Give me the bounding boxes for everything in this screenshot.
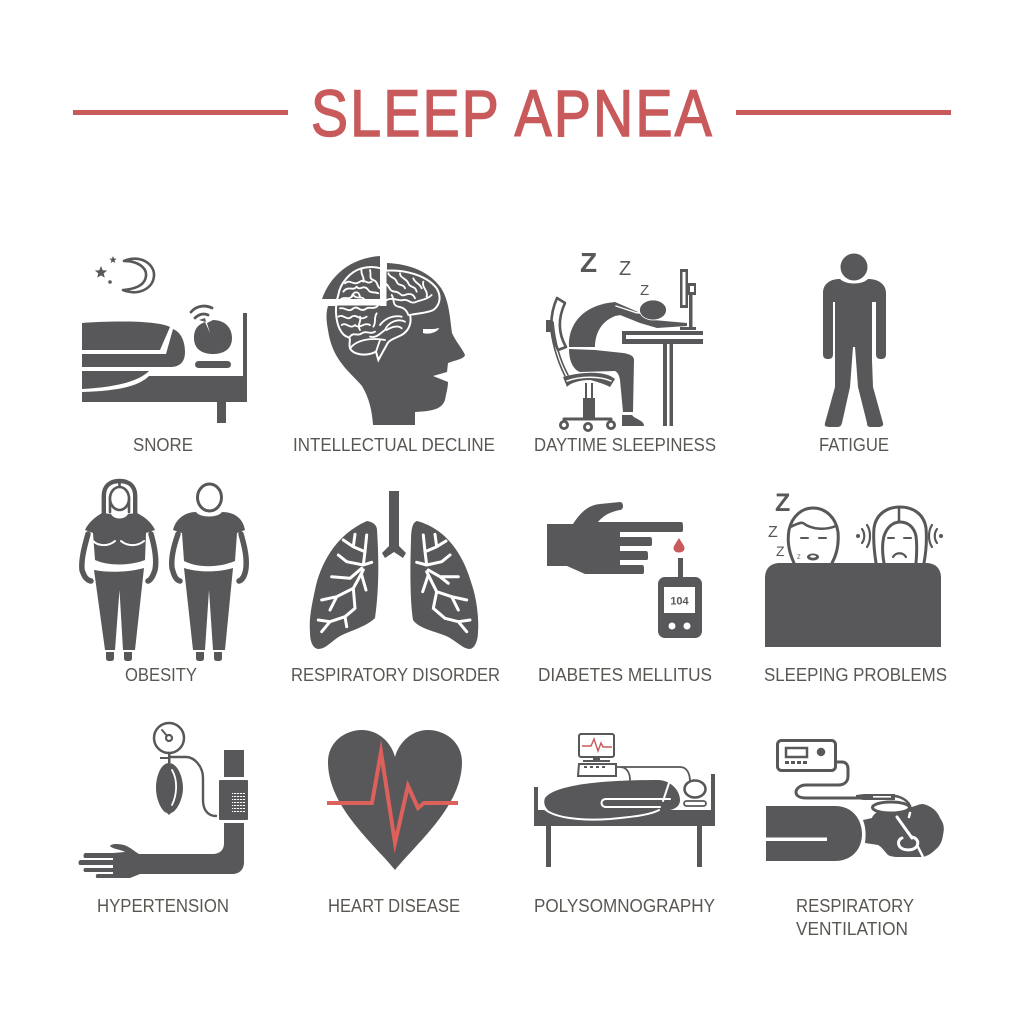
shoe [622,415,644,426]
label: respiratory ventilation: RESPIRATORY [796,896,914,916]
bulb [156,763,183,815]
mask strap [872,802,910,813]
snoring man [788,508,838,563]
wires [616,767,690,782]
sleep letters: Z [768,524,778,541]
glucose meter [658,558,702,638]
icon: heart with ecg [327,730,462,870]
trachea [382,491,406,558]
sleep letters: Z [776,543,785,559]
sleep letters: Z [640,282,649,299]
sleep letters: Z [619,258,631,280]
label: diabetes mellitus: DIABETES MELLITUS [538,665,712,685]
cut lines [380,254,386,306]
hand [547,502,683,574]
patient body [766,806,862,861]
blanket [765,563,941,647]
moon and stars [95,256,154,292]
bed [82,313,247,402]
label: daytime sleepiness: DAYTIME SLEEPINESS [534,435,716,455]
ecg line [327,752,458,843]
sleep letters [580,247,649,299]
icon: polysomnography [534,734,715,867]
sleeper [82,322,170,350]
icon: obesity couple [82,481,246,661]
cuff dial grid [232,792,245,813]
label: intellectual decline: INTELLECTUAL DECLINE [293,435,495,455]
label: respiratory ventilation [796,896,914,939]
icon: fatigue figure [823,254,886,427]
icon: brain head [320,254,465,425]
label: snore: SNORE [133,435,193,455]
legs [569,349,634,412]
title: SLEEP APNEA [311,76,712,150]
arm [615,306,687,328]
head and pillow [684,780,706,798]
monitor [680,269,688,308]
head silhouette [326,263,465,425]
brain [336,267,440,360]
label: heart disease: HEART DISEASE [328,896,460,916]
sleep letters [768,489,801,561]
bed [534,774,715,826]
patient head [863,804,944,857]
left branches [318,534,372,632]
icon: sleeping problems [765,489,943,647]
person torso [569,302,638,347]
head and sound [194,320,232,354]
label: respiratory ventilation: VENTILATION [796,919,908,939]
man [172,484,246,661]
label: fatigue: FATIGUE [819,435,889,455]
icon: respiratory ventilation [766,740,944,861]
desk [622,331,703,344]
icon: blood pressure cuff [78,723,248,878]
sleep letters: Z [775,489,790,517]
cuff [219,780,248,820]
label: hypertension: HYPERTENSION [97,896,229,916]
patient [544,780,680,818]
sleep letters: Z [580,247,597,278]
right lung [410,521,478,649]
eye [423,328,439,334]
right branches [417,534,470,632]
icon: lungs [310,491,478,649]
label: sleeping problems: SLEEPING PROBLEMS [764,665,947,685]
cpap machine [778,740,836,770]
label: polysomnography: POLYSOMNOGRAPHY [534,896,715,916]
hose [796,762,858,798]
head [640,300,666,320]
left lung [310,521,378,649]
office chair [546,298,615,431]
label: respiratory disorder: RESPIRATORY DISORDER [291,665,500,685]
mask tube [897,813,923,857]
label: obesity: OBESITY [125,665,197,685]
glucose meter: 104 [670,596,690,608]
sleep letters: Z [797,555,801,561]
upper arm [224,750,244,777]
icon: snore [82,256,247,423]
icon: daytime sleepiness [546,247,703,431]
icon: diabetes glucose test [547,502,702,638]
woman [82,481,156,661]
detached skull quarter [322,256,380,299]
title [73,76,951,150]
arm and hand [78,823,244,878]
sound waves [856,525,943,547]
annoyed woman [874,507,926,563]
tube [170,757,216,816]
monitor [578,734,616,776]
gauge [154,723,184,763]
blood drop [674,538,684,552]
